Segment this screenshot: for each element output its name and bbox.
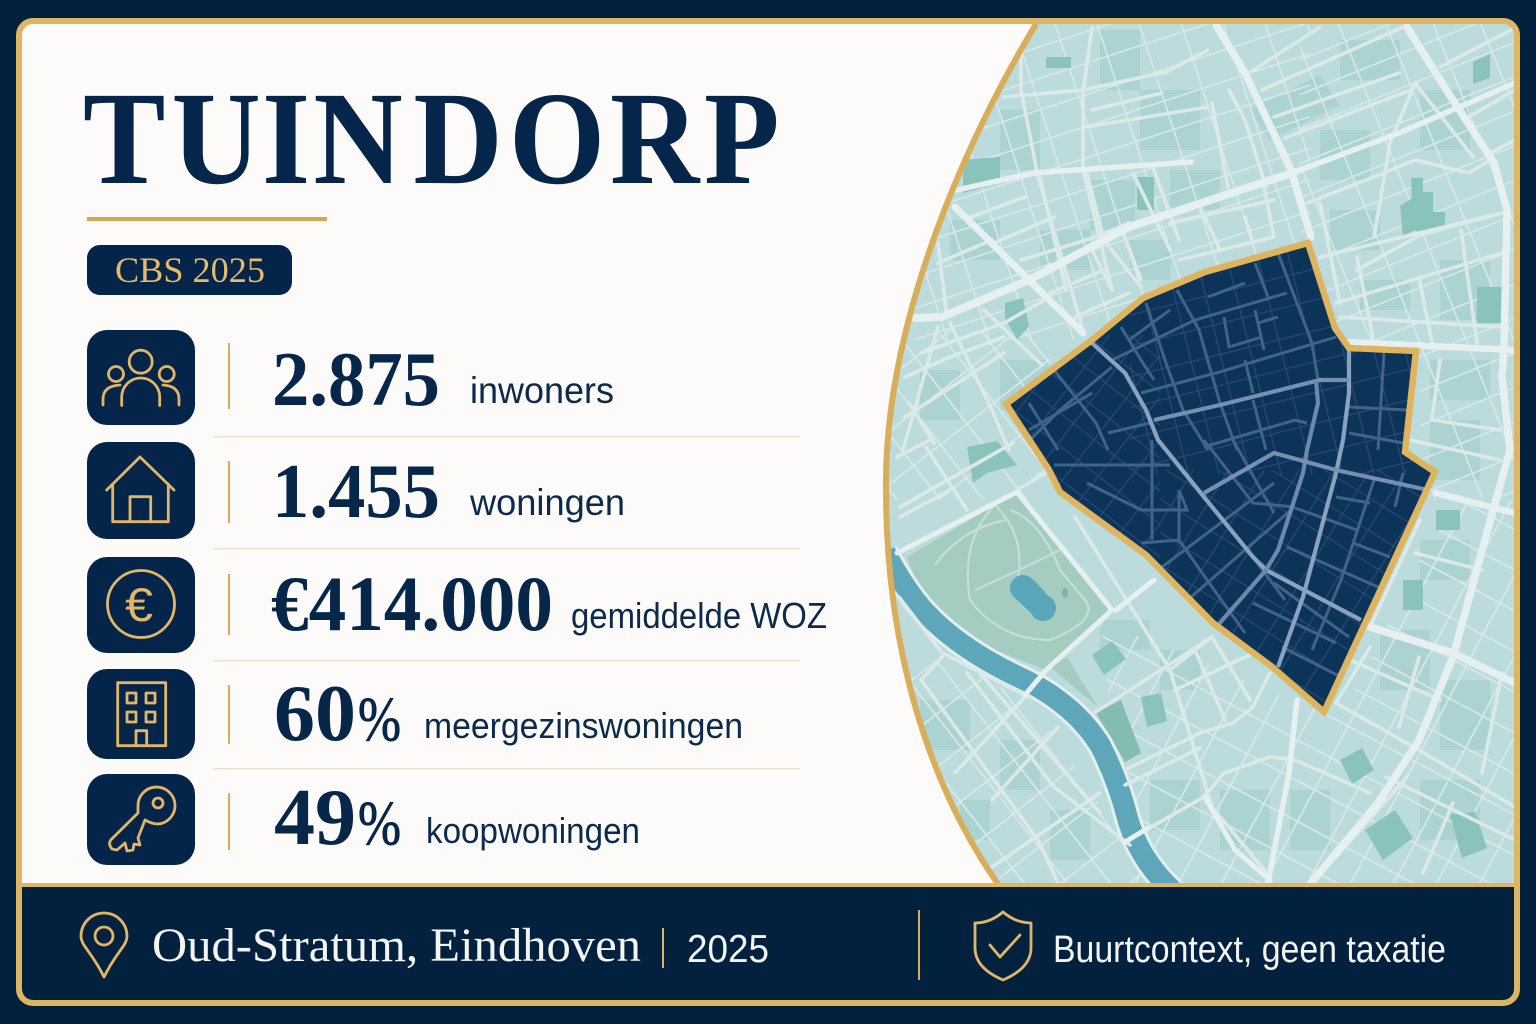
stat: 2.875: 2.875 (272, 336, 440, 422)
year: 2025 (687, 928, 769, 971)
badge: CBS 2025 (87, 245, 292, 295)
location text: Oud-Stratum, Eindhoven (152, 919, 641, 972)
row: inwoners (87, 330, 614, 425)
label: inwoners: inwoners (470, 370, 614, 411)
label: woningen: woningen (469, 482, 625, 523)
icon: house (87, 442, 195, 539)
map curved edge (886, 24, 1036, 884)
disclaimer: Buurtcontext, geen taxatie (1053, 929, 1446, 971)
icon: key (87, 774, 195, 865)
stat: 49%: 49 (274, 774, 356, 862)
icon: euro (87, 557, 195, 653)
river (885, 552, 1172, 890)
major roads (897, 25, 1515, 883)
icon: people (87, 330, 195, 425)
stat: 414.000 euro: €414.000 (271, 560, 553, 647)
green strip (1096, 700, 1141, 762)
neighbourhood gold boundary (1006, 243, 1435, 712)
city blocks (920, 30, 1490, 860)
darker building blocks (963, 54, 1502, 860)
stat: 49%: % (358, 790, 401, 858)
row: koopwoningen (87, 774, 640, 865)
stat: 60%: % (358, 686, 401, 754)
stat: 60%: 60 (274, 670, 356, 758)
label: gemiddelde WOZ: gemiddelde WOZ (571, 595, 827, 636)
title underline (87, 217, 327, 221)
stat: 60% (274, 670, 401, 758)
park paths (935, 505, 1088, 640)
street grids (880, 20, 1520, 890)
map panel (880, 20, 1520, 890)
row: meergezinswoningen (87, 669, 743, 759)
badge: CBS 2025: CBS 2025 (115, 250, 265, 290)
block grids (1013, 252, 1420, 702)
icon: euro: € (125, 578, 153, 631)
stat: 49% (274, 774, 401, 862)
title: TUINDORP (83, 65, 780, 212)
footer bar (19, 883, 1517, 1003)
label: meergezinswoningen: meergezinswoningen (424, 705, 743, 746)
main streets (1092, 343, 1428, 667)
row: woningen (87, 442, 625, 539)
thin roads (897, 27, 1515, 883)
icon: apartment building (87, 669, 195, 759)
neighbourhood Tuindorp (1010, 247, 1431, 707)
row: gemiddelde WOZ (87, 557, 827, 653)
icon: location pin (81, 913, 127, 977)
label: koopwoningen: koopwoningen (426, 810, 640, 851)
lake (1010, 575, 1068, 621)
park (907, 492, 1112, 670)
stat: 1.455: 1.455 (272, 448, 440, 534)
icon: shield check (975, 912, 1031, 980)
inner streets (1029, 253, 1407, 677)
